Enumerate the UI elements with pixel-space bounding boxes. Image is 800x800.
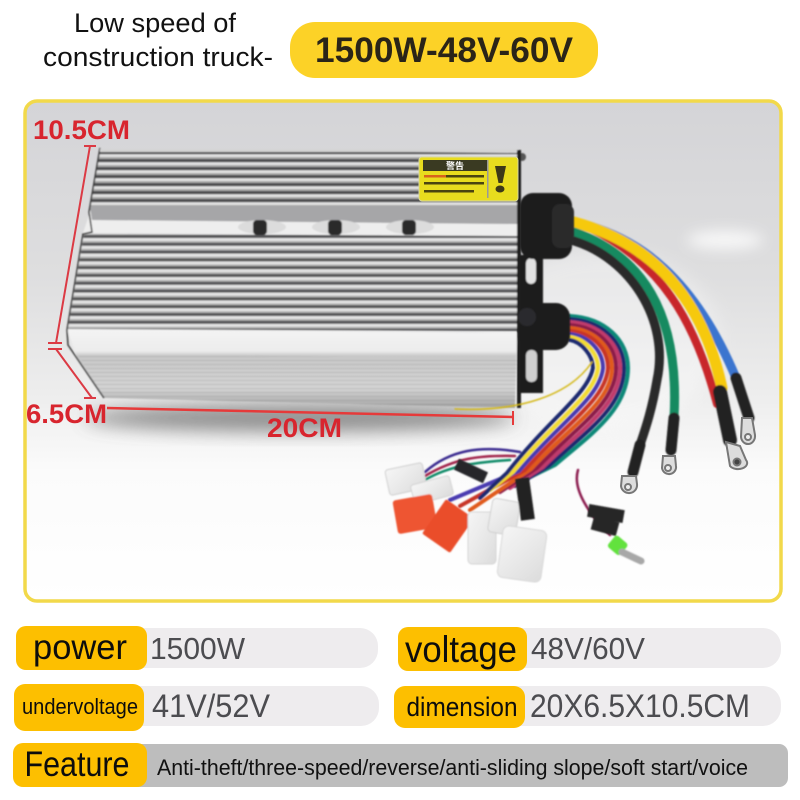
front face xyxy=(67,329,517,408)
icon: connectors xyxy=(385,459,641,583)
spec: voltage: 48V/60V xyxy=(531,631,645,666)
spec: voltage xyxy=(398,627,781,671)
icon: ring terminals xyxy=(621,418,755,493)
title: product type xyxy=(43,8,273,72)
dimension: 6.5CM: 6.5CM xyxy=(26,399,107,429)
spec: feature: Anti-theft/three-speed/reverse/anti-sliding slope/soft start/voice xyxy=(157,755,748,780)
icon: warning label: 警告 xyxy=(446,160,464,171)
spec: power: 1500W xyxy=(150,631,246,666)
spec: dimension: 20X6.5X10.5CM xyxy=(530,688,750,724)
icon: controller unit xyxy=(67,148,526,432)
title pill: specification xyxy=(290,22,598,78)
title: product type: Low speed of xyxy=(74,8,236,38)
spec: power: power xyxy=(33,628,127,667)
top trim xyxy=(100,149,518,152)
left edge xyxy=(67,148,104,398)
spec: dimension xyxy=(394,686,781,728)
spec: feature: Feature xyxy=(24,745,130,784)
icon: mounting bracket and cable glands xyxy=(518,193,574,393)
dimension: 10.5CM: 10.5CM xyxy=(33,115,130,145)
dimension: 6.5CM xyxy=(26,349,107,429)
spec: feature xyxy=(13,743,788,787)
screws xyxy=(238,220,434,235)
panel: product photo xyxy=(25,101,781,601)
title pill: specification: 1500W-48V-60V xyxy=(315,31,574,70)
spec: undervoltage: undervoltage xyxy=(22,694,138,719)
middle groove xyxy=(83,212,518,236)
icon: power cables xyxy=(574,222,749,472)
spec: power xyxy=(16,626,378,670)
icon: warning label xyxy=(419,157,518,201)
dimension: 10.5CM xyxy=(33,115,130,343)
spec: undervoltage xyxy=(14,684,379,731)
dimension: 20CM xyxy=(107,408,513,443)
title: product type: construction truck- xyxy=(43,42,273,72)
upper fins xyxy=(89,149,518,214)
lower fins xyxy=(68,234,518,331)
dimension: 20CM: 20CM xyxy=(267,413,342,443)
spec: undervoltage: 41V/52V xyxy=(152,688,271,724)
spec: dimension: dimension xyxy=(406,692,518,722)
icon: signal wire bundle xyxy=(425,316,628,535)
spec: voltage: voltage xyxy=(405,629,517,670)
